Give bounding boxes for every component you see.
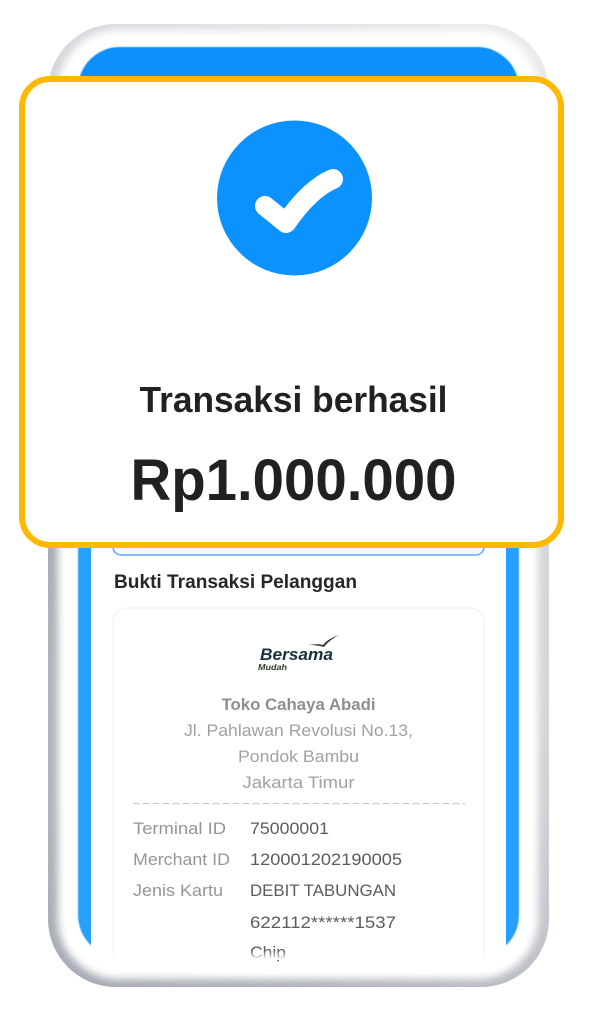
transaction labels: Merchant ID [133, 850, 230, 869]
merchant address: Pondok Bambu [238, 747, 359, 766]
logo: Bersama Mudah: Mudah [258, 663, 287, 672]
merchant address [184, 721, 413, 792]
logo: Bersama Mudah: Bersama [260, 645, 333, 664]
merchant address: Jakarta Timur [242, 773, 355, 792]
phone mockup [48, 24, 549, 987]
transaction values [250, 819, 402, 962]
transaction values: 75000001 [250, 819, 329, 838]
bottom screen fade [91, 950, 506, 960]
transaction values: Chip [250, 943, 286, 962]
phone screen blue background [78, 47, 519, 957]
transaction values: 120001202190005 [250, 850, 402, 869]
merchant address: Jl. Pahlawan Revolusi No.13, [184, 721, 413, 740]
transaction values: DEBIT TABUNGAN [250, 881, 396, 900]
icon: success check [217, 120, 372, 276]
status title: Transaksi berhasil [140, 379, 448, 420]
logo: Bersama Mudah [258, 635, 339, 672]
transaction labels: Jenis Kartu [133, 881, 223, 900]
success popup card [22, 79, 561, 545]
receipt card [113, 608, 484, 962]
transaction values: 622112******1537 [250, 913, 396, 932]
transaction labels: Terminal ID [133, 819, 226, 838]
amount: Rp1.000.000 [130, 448, 456, 513]
merchant name: Toko Cahaya Abadi [222, 695, 376, 714]
transaction labels [133, 819, 230, 900]
receipt white page [91, 200, 506, 964]
heading: customer receipt: Bukti Transaksi Pelanggan [114, 572, 357, 593]
previous card edge [113, 500, 484, 555]
phone frame [48, 24, 549, 987]
